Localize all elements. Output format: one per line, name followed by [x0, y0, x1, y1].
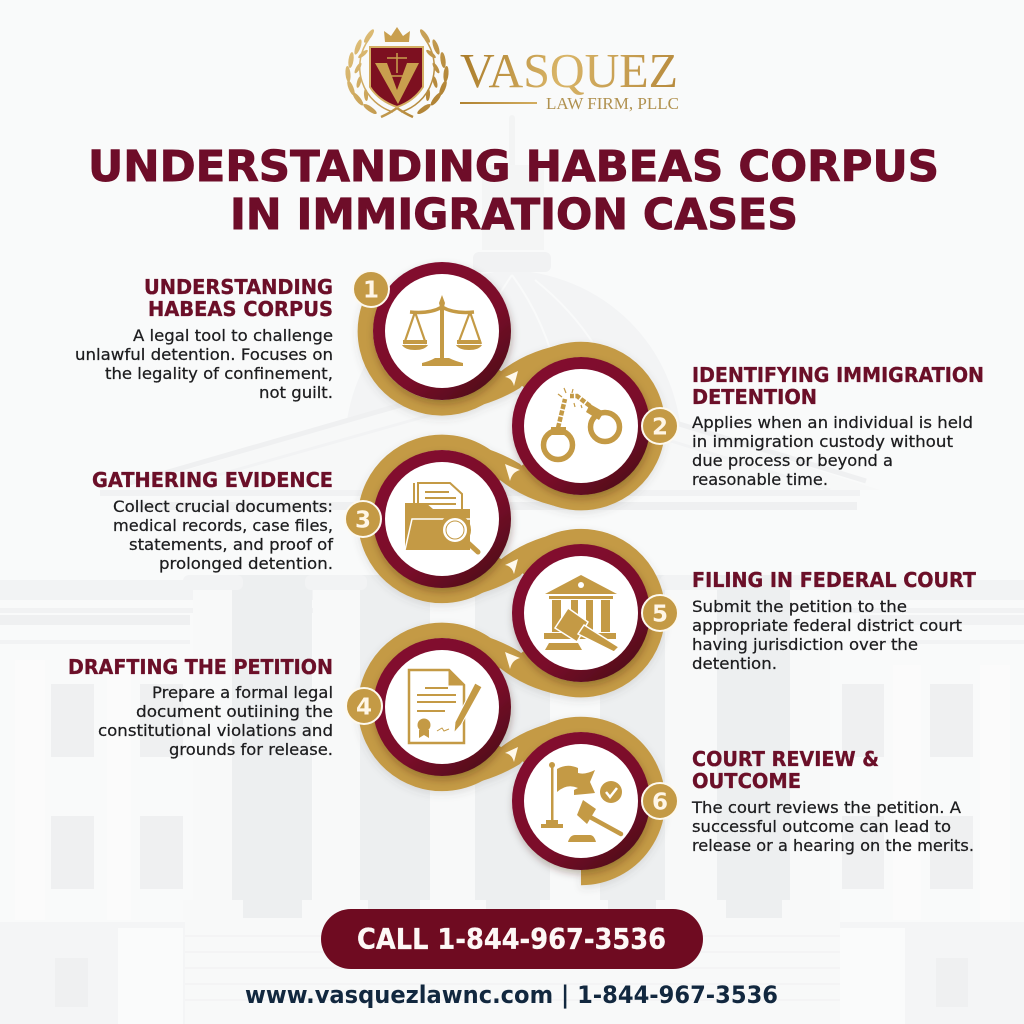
title: UNDERSTANDING HABEAS CORPUS — [88, 143, 939, 192]
call button — [321, 909, 703, 969]
text block: court review and outcome: OUTCOME — [692, 769, 801, 793]
text block: filing in federal court: appropriate federal district court — [692, 616, 962, 635]
text block: understanding habeas corpus: HABEAS CORPUS — [148, 297, 333, 321]
text block: court review and outcome — [691, 747, 974, 855]
badge 1 — [353, 271, 389, 307]
text block: court review and outcome: The court reviews the petition. A — [691, 798, 961, 817]
step 1 circle: scales of justice — [373, 262, 511, 400]
arrow: step 3 to 5 — [505, 559, 518, 574]
text block: drafting the petition — [68, 655, 333, 759]
text block: identifying immigration detention — [692, 363, 984, 489]
badge 6 — [642, 783, 678, 819]
badge 6: 6 — [652, 790, 668, 816]
logo: firm suffix: LAW FIRM, PLLC — [546, 94, 679, 113]
text block: understanding habeas corpus: the legality of confinement, — [105, 364, 333, 383]
text block: court review and outcome: COURT REVIEW & — [692, 747, 879, 771]
logo: shield — [370, 47, 423, 107]
text block: drafting the petition: grounds for release. — [169, 740, 333, 759]
title — [88, 143, 939, 240]
text block: filing in federal court: FILING IN FEDERAL COURT — [692, 568, 976, 592]
text block: gathering evidence: statements, and proof of — [129, 535, 333, 554]
text block: filing in federal court — [692, 568, 976, 673]
logo: firm name: VASQUEZ — [460, 43, 678, 98]
icon: handcuffs — [544, 388, 620, 460]
step 2 circle: broken handcuffs — [512, 357, 650, 495]
text block: drafting the petition: Prepare a formal legal — [152, 683, 333, 702]
badge 5 — [642, 595, 678, 631]
text block: identifying immigration detention: DETENTION — [692, 385, 817, 409]
text block: identifying immigration detention: reasonable time. — [692, 470, 828, 489]
badge 4 — [346, 688, 382, 724]
step 4 circle: petition document — [373, 638, 511, 776]
badge 5: 5 — [652, 602, 668, 628]
text block: court review and outcome: release or a hearing on the merits. — [692, 836, 974, 855]
step 6 circle: flag and gavel — [512, 732, 650, 870]
title: IN IMMIGRATION CASES — [230, 191, 798, 240]
arrow: step 5 to 4 — [505, 652, 520, 669]
footer contact line: www.vasquezlawnc.com | 1-844-967-3536 — [245, 981, 778, 1009]
text block: identifying immigration detention: due process or beyond a — [692, 451, 893, 470]
text block: drafting the petition: document outiining the — [136, 702, 333, 721]
text block: gathering evidence — [92, 468, 333, 573]
gold ribbon path — [365, 292, 657, 878]
text block: identifying immigration detention: Applies when an individual is held — [692, 413, 973, 432]
icon: flag, check and gavel — [541, 762, 622, 842]
text block: gathering evidence: Collect crucial documents: — [113, 497, 333, 516]
text block: gathering evidence: prolonged detention. — [159, 554, 333, 573]
step 5 circle: courthouse and gavel — [512, 544, 650, 682]
icon: courthouse gavel — [544, 575, 619, 652]
icon: folder — [405, 483, 478, 552]
step 3 circle: folder with magnifier — [373, 450, 511, 588]
icon: scales — [402, 295, 482, 366]
badge 3 — [345, 501, 381, 537]
text block: understanding habeas corpus: not guilt. — [259, 383, 333, 402]
text block: drafting the petition: DRAFTING THE PETITION — [68, 655, 333, 679]
text block: identifying immigration detention: IDENTIFYING IMMIGRATION — [692, 363, 984, 387]
icon: document and pen — [409, 670, 482, 743]
text block: filing in federal court: Submit the petition to the — [692, 597, 907, 616]
text block: drafting the petition: constitutional violations and — [98, 721, 333, 740]
text block: filing in federal court: having jurisdiction over the — [692, 635, 918, 654]
logo — [345, 27, 679, 117]
badge 2 — [642, 408, 678, 444]
text block: filing in federal court: detention. — [692, 654, 777, 673]
logo: divider — [460, 102, 537, 104]
text block: understanding habeas corpus: A legal tool to challenge — [133, 326, 333, 345]
arrow: step 4 to 6 — [505, 747, 518, 762]
arrow: step 2 to 3 — [505, 464, 520, 481]
text block: gathering evidence: medical records, case files, — [113, 516, 333, 535]
text block: gathering evidence: GATHERING EVIDENCE — [92, 468, 333, 492]
badge 1: 1 — [363, 278, 379, 304]
text block: identifying immigration detention: in immigration custody without — [692, 432, 953, 451]
logo: laurel wreath — [345, 28, 449, 117]
text block: understanding habeas corpus: unlawful detention. Focuses on — [75, 345, 333, 364]
text block: understanding habeas corpus — [75, 275, 333, 402]
badge 2: 2 — [652, 414, 668, 440]
text block: court review and outcome: successful outcome can lead to — [692, 817, 951, 836]
badge 3: 3 — [355, 508, 371, 534]
arrow: step 1 to 2 — [505, 371, 518, 386]
logo: crown — [384, 27, 410, 42]
text block: understanding habeas corpus: UNDERSTANDING — [144, 275, 333, 299]
badge 4: 4 — [356, 694, 372, 720]
call button: CALL 1-844-967-3536 — [357, 923, 666, 956]
